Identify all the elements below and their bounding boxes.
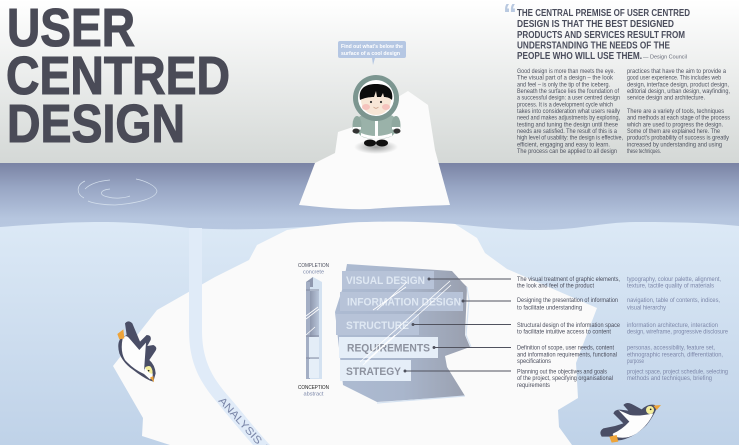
block edge highlight	[377, 287, 471, 403]
underwater background	[0, 222, 739, 445]
pull quote: — Design Council	[643, 54, 687, 60]
body text column two: practices that have the aim to provide a	[627, 68, 727, 75]
iceberg below the surface	[113, 222, 597, 445]
body text column two: these techniques.	[627, 148, 661, 155]
leader lines	[404, 278, 511, 372]
layer techniques: information architecture, interaction	[627, 322, 719, 329]
layer: information design	[340, 292, 463, 311]
layer descriptions: The visual treatment of graphic elements,	[517, 276, 620, 283]
layer: structure: STRUCTURE	[346, 320, 409, 332]
pull quote	[517, 7, 690, 62]
body text column two	[626, 68, 730, 155]
layer descriptions: the look and feel of the product	[517, 282, 594, 290]
penguin diving left	[117, 321, 156, 382]
body text column one: and feel – is only the tip of the iceberg.	[517, 81, 610, 88]
iceberg above and at the surface	[299, 91, 450, 209]
layer descriptions	[517, 276, 620, 389]
layer: visual design: VISUAL DESIGN	[346, 275, 425, 287]
layer descriptions: Designing the presentation of information	[517, 297, 618, 304]
speech bubble: surface of a cool design	[341, 51, 401, 57]
layer descriptions: requirements	[517, 382, 550, 389]
body text column two: editorial design, urban design, wayfinding,	[627, 88, 730, 95]
pillar scale labels: concrete	[303, 270, 324, 276]
layer: visual design	[342, 271, 434, 289]
body text column one: efficient, engaging and easy to learn.	[517, 141, 610, 148]
layer: strategy	[340, 360, 411, 381]
inuit character	[352, 75, 400, 154]
body text column one: Beneath the surface lies the foundation of	[517, 88, 619, 95]
layer techniques: project space, project schedule, selecting	[627, 368, 728, 376]
pillar scale labels: CONCEPTION	[298, 385, 329, 391]
design planes block	[335, 264, 470, 402]
layer: requirements: REQUIREMENTS	[347, 342, 430, 354]
water ripples	[78, 179, 157, 205]
layer techniques: design, wireframe, progressive disclosure	[627, 328, 728, 336]
body text column two: good user experience. This includes web	[627, 75, 721, 82]
sky background	[0, 0, 739, 163]
layer descriptions: Structural design of the information space	[517, 322, 620, 329]
pillar progress bar	[306, 277, 322, 379]
body text column one: testing and tuning the design until these	[517, 121, 619, 128]
body text column two: Some of them are explained here. The	[627, 128, 720, 135]
layer techniques: methods and techniques, briefing	[627, 375, 713, 382]
body text column two: There are a variety of tools, techniques	[627, 108, 724, 115]
layer descriptions: Planning out the objectives and goals	[517, 368, 607, 376]
layer techniques: personas, accessibility, feature set,	[627, 344, 715, 352]
layer: requirements	[339, 337, 438, 358]
body text column one: needs are satisfied. The result of this is a	[517, 128, 617, 135]
layer techniques	[627, 276, 728, 382]
analysis channel	[189, 228, 272, 445]
layer descriptions: to facilitate intuitive access to content	[517, 328, 611, 336]
pull quote: THE CENTRAL PREMISE OF USER CENTRED	[517, 7, 690, 19]
layer: strategy: STRATEGY	[346, 366, 402, 378]
pillar scale labels	[298, 263, 329, 398]
body text column one: process. It is a development cycle which	[517, 101, 613, 108]
body text column one: need and makes adjustments by exploring,	[517, 115, 620, 122]
layer: information design: INFORMATION DESIGN	[347, 296, 461, 308]
layer descriptions: and information requirements, functional	[517, 352, 617, 358]
pull quote: PRODUCTS AND SERVICES RESULT FROM	[517, 29, 685, 41]
layer techniques: purpose	[627, 358, 644, 365]
pull quote: PEOPLE WHO WILL USE THEM.	[517, 50, 642, 62]
title: CENTRED	[6, 46, 230, 106]
pull quote: DESIGN IS THAT THE BEST DESIGNED	[517, 18, 674, 30]
body text column one: a successful design: a user centred design	[517, 95, 620, 102]
pillar scale labels: COMPLETION	[298, 263, 329, 269]
layer descriptions: to facilitate understanding	[517, 304, 583, 312]
sea surface band	[0, 163, 739, 233]
body text column one: Good design is more than meets the eye.	[517, 68, 615, 75]
layer descriptions: Definition of scope, user needs, content	[517, 344, 614, 352]
body text column two: increased by understanding and using	[627, 141, 723, 148]
ice cracks	[360, 281, 451, 365]
layer techniques: ethnographic research, differentiation,	[627, 352, 723, 358]
body text column one: takes into consideration what users really	[517, 108, 621, 115]
layer descriptions: specifications	[517, 358, 551, 365]
body text column two: service design and architecture.	[627, 95, 705, 102]
layer: structure	[336, 314, 419, 335]
body text column two: product's probability of success is greatly	[627, 135, 730, 142]
speech bubble: Find out what's below the	[341, 44, 403, 50]
pillar scale labels: abstract	[304, 392, 324, 398]
body text column two: and methods at each stage of the process	[627, 115, 730, 122]
body text column two: design, interface design, product design,	[627, 81, 729, 88]
body text column one: high level of usability: the design is effective,	[517, 135, 623, 142]
layer descriptions: of the project, specifying organisational	[517, 375, 613, 382]
layer techniques: navigation, table of contents, indices,	[627, 297, 720, 304]
body text column two: which are used to progress the design.	[626, 121, 723, 128]
title: DESIGN	[7, 94, 185, 154]
speech bubble	[338, 41, 406, 65]
penguin flying right	[600, 403, 661, 443]
layer techniques: texture, tactile quality of materials	[627, 282, 714, 290]
body text column one: The visual part of a design – the look	[517, 75, 614, 82]
pull quote: UNDERSTANDING THE NEEDS OF THE	[517, 40, 670, 52]
body text column one: The process can be applied to all design	[517, 148, 617, 155]
layer techniques: typography, colour palette, alignment,	[627, 276, 721, 283]
title	[6, 0, 230, 154]
layer techniques: visual hierarchy	[627, 304, 667, 312]
body text column one	[517, 68, 623, 155]
